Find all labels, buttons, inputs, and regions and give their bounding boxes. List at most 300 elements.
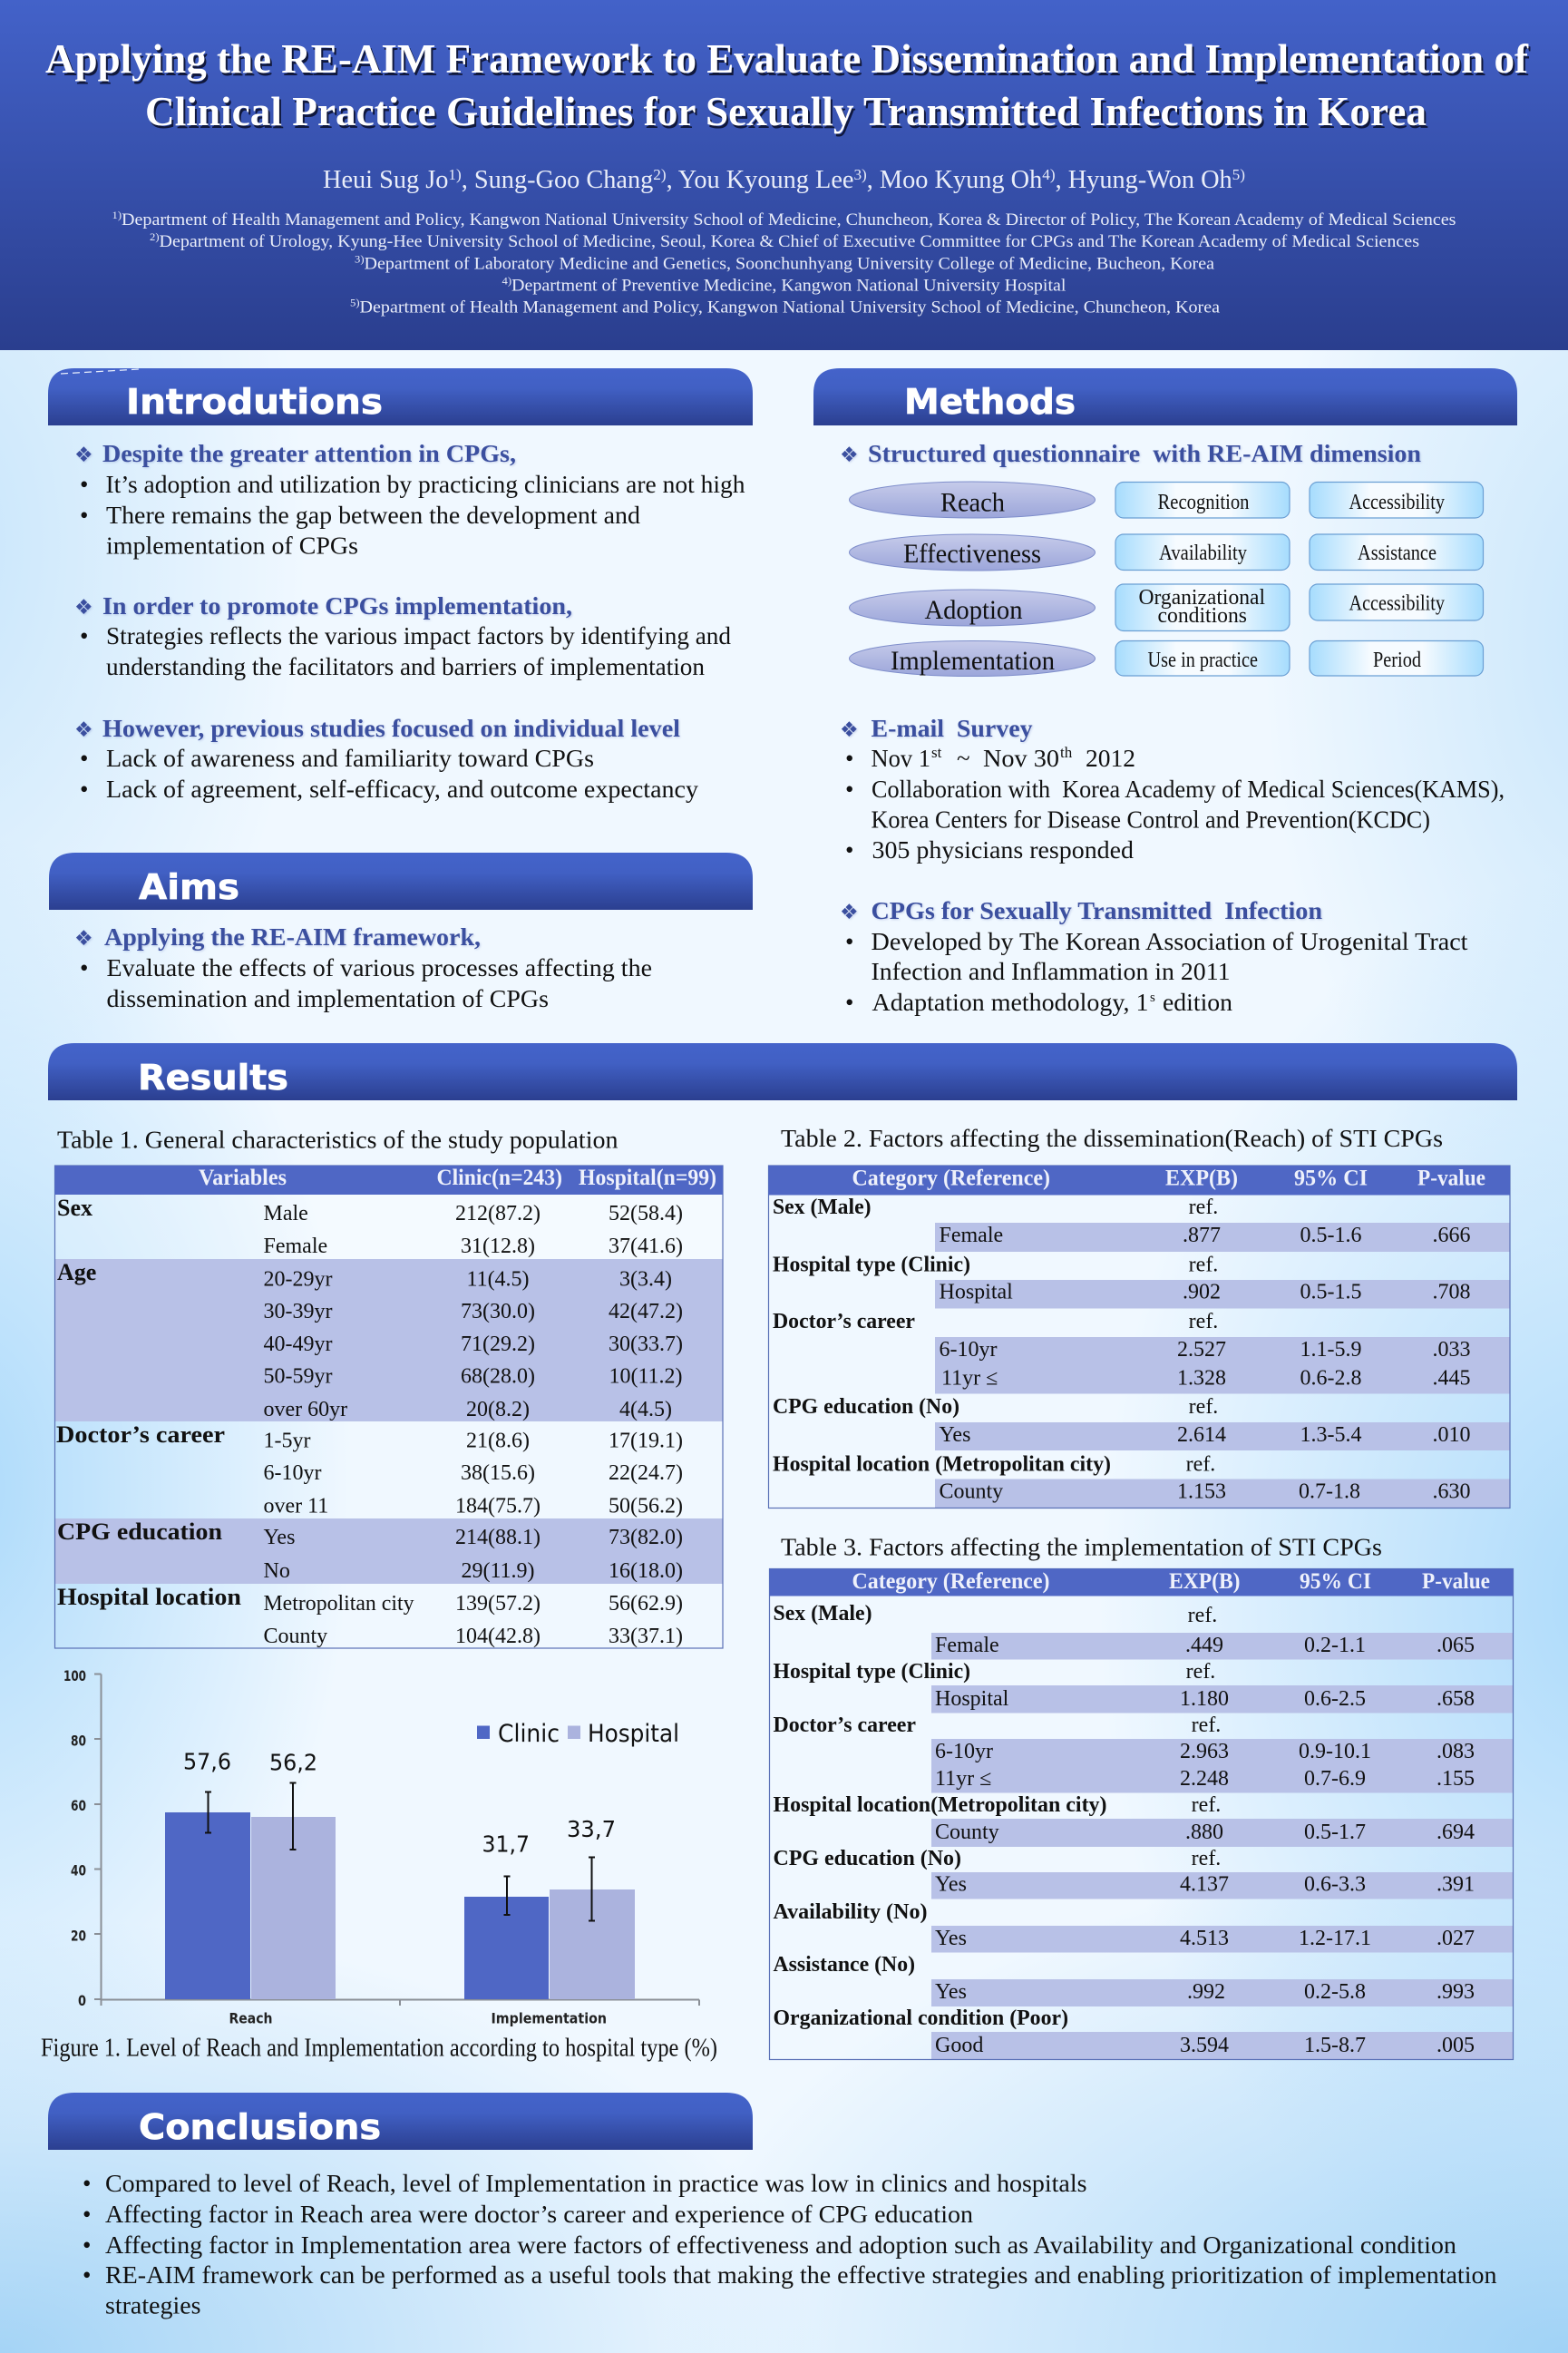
dimension: adoption: Accessibility xyxy=(1349,591,1445,615)
table 2 rows: hospital location: 0.7-1.8 xyxy=(1299,1480,1360,1504)
text block: CPGs for STI: • xyxy=(845,989,853,1016)
table 2 rows: sex: .877 xyxy=(1183,1224,1221,1247)
table 3 rows: doctor's career: ref. xyxy=(1192,1713,1221,1737)
table 1 row group: sex: Male xyxy=(263,1202,308,1225)
text block: CPGs for STI: ❖ xyxy=(840,901,859,924)
chart axes xyxy=(94,1674,699,2006)
text block: individual level xyxy=(74,715,699,803)
table 3 rows: doctor's career: 6-10yr xyxy=(935,1740,993,1763)
table 1 row group: doctor's career: 17(19.1) xyxy=(609,1430,683,1453)
text block: despite greater attention: There remains the gap between the development and xyxy=(106,502,641,529)
table 3 rows: CPG education: 0.6-3.3 xyxy=(1304,1872,1366,1896)
table 3 header row: EXP(B) xyxy=(1169,1569,1241,1594)
table 1 row group: CPG education: 73(82.0) xyxy=(609,1526,683,1549)
y axis labels: 0 xyxy=(78,1992,86,2009)
table 3 rows: hospital type: .658 xyxy=(1437,1687,1475,1711)
text block: individual level: Lack of awareness and familiarity toward CPGs xyxy=(106,745,594,772)
category labels xyxy=(229,2010,607,2026)
dimension: adoption: conditions xyxy=(1157,604,1247,628)
table 2 rows: doctor's career: 1.1-5.9 xyxy=(1300,1338,1362,1362)
table 1 header row: Clinic(n=243) xyxy=(437,1166,562,1190)
table 1 row group: hospital location: 139(57.2) xyxy=(455,1592,541,1616)
table 2 rows: doctor's career: 1.328 xyxy=(1177,1366,1226,1390)
title xyxy=(45,35,1529,134)
table 3 header row: P-value xyxy=(1422,1569,1490,1594)
table 1 row group: CPG education xyxy=(57,1518,683,1583)
table 3 rows: sex: Female xyxy=(935,1634,999,1657)
table 1 row group: sex xyxy=(57,1195,683,1258)
table 1 row group: age: 71(29.2) xyxy=(461,1333,535,1356)
heading: introductions xyxy=(48,368,753,425)
text block: individual level: • xyxy=(80,745,88,772)
text block: e-mail survey: Nov 1 xyxy=(871,745,930,772)
table 3 rows: sex: .449 xyxy=(1185,1634,1223,1657)
text block: despite greater attention: Despite the greater attention in CPGs, xyxy=(102,440,516,467)
table 1 row group: age: 10(11.2) xyxy=(609,1364,683,1388)
y axis labels xyxy=(63,1667,86,2009)
table 1 row group: doctor's career: 22(24.7) xyxy=(609,1461,683,1485)
table 2 rows: CPG education: 2.614 xyxy=(1177,1423,1226,1447)
table 3 rows: doctor's career: 0.7-6.9 xyxy=(1304,1767,1366,1791)
text block: promote implementation: Strategies reflects the various impact factors by identifying and xyxy=(106,622,732,649)
error bars xyxy=(205,1783,595,1921)
table 2 rows: doctor's career: 6-10yr xyxy=(940,1338,997,1362)
table 1 row group: age: Age xyxy=(57,1259,96,1285)
table 1 row group: doctor's career: 50(56.2) xyxy=(609,1495,683,1518)
table 1 row group: sex: 212(87.2) xyxy=(455,1202,541,1225)
affiliations xyxy=(112,209,1456,317)
table 1 header row: Hospital(n=99) xyxy=(579,1166,716,1190)
table 3 body xyxy=(769,1569,1513,2059)
text block: aims: dissemination and implementation of CPGs xyxy=(107,985,549,1012)
text block: despite greater attention: It’s adoption and utilization by practicing clinicians are not high xyxy=(105,471,745,498)
authors: 2) xyxy=(653,166,667,183)
table 1 row group: CPG education: 29(11.9) xyxy=(461,1559,535,1583)
y axis labels: 40 xyxy=(71,1861,86,1879)
table 1 body xyxy=(54,1166,723,1648)
table 1 row group: hospital location: 33(37.1) xyxy=(609,1625,683,1648)
panel: table 1 xyxy=(54,1127,723,1648)
table 2 header row: Category (Reference) xyxy=(852,1167,1050,1190)
text block: individual level: Lack of agreement, self-efficacy, and outcome expectancy xyxy=(106,776,699,803)
table 3 rows: assistance: 0.2-5.8 xyxy=(1304,1980,1366,2004)
table 1 row group: age: 11(4.5) xyxy=(466,1268,530,1292)
text block: conclusions list: • xyxy=(83,2231,91,2259)
table 1 row group: age: 73(30.0) xyxy=(461,1300,535,1323)
table 1 row group: doctor's career: 38(15.6) xyxy=(461,1461,535,1485)
table 1 row group: hospital location: Hospital location xyxy=(57,1584,242,1610)
text block: conclusions list xyxy=(83,2170,1497,2319)
table 1 row group: age: over 60yr xyxy=(263,1398,347,1421)
table 2 rows: hospital type: .708 xyxy=(1433,1281,1471,1304)
table 1 row group: hospital location xyxy=(57,1584,683,1648)
heading: results: Results xyxy=(138,1058,288,1098)
text block: promote implementation: In order to promote CPGs implementation, xyxy=(102,592,572,620)
text block: e-mail survey: Nov 30 xyxy=(983,745,1059,772)
table 2 rows: sex: 0.5-1.6 xyxy=(1300,1224,1362,1247)
text block: CPGs for STI: Infection and Inflammation in 2011 xyxy=(871,958,1230,985)
dimension: adoption: Organizational xyxy=(1139,586,1265,610)
panel: introductions xyxy=(48,368,753,803)
table 2 rows: sex: Female xyxy=(940,1224,1003,1247)
table 1 row group: sex: 37(41.6) xyxy=(609,1235,683,1258)
heading: methods xyxy=(813,368,1517,425)
table 3 rows: doctor's career xyxy=(773,1713,1475,1791)
table 2 rows: CPG education: CPG education (No) xyxy=(773,1395,959,1419)
table 3 rows: hospital location: ref. xyxy=(1192,1793,1221,1817)
figure 1 caption: Figure 1. Level of Reach and Implementation according to hospital type (%) xyxy=(41,2034,717,2063)
text block: promote implementation: ❖ xyxy=(74,596,93,620)
table 3 header row xyxy=(769,1569,1513,1596)
title: Applying the RE-AIM Framework to Evaluate Dissemination and Implementation of xyxy=(45,35,1529,82)
table 3 header row: 95% CI xyxy=(1300,1569,1371,1594)
table 1 row group: age xyxy=(57,1259,683,1421)
table 3 rows: organizational condition: 1.5-8.7 xyxy=(1304,2034,1366,2057)
bar chart: figure 1 xyxy=(41,1667,717,2063)
text block: e-mail survey: E-mail Survey xyxy=(871,715,1033,742)
affiliations: 2) xyxy=(150,230,160,243)
table 3 rows: organizational condition xyxy=(773,2006,1475,2057)
text block: e-mail survey: st xyxy=(931,744,942,761)
table 3 header row: Category (Reference) xyxy=(852,1569,1050,1594)
table 3 caption: Table 3. Factors affecting the implementation of STI CPGs xyxy=(781,1533,1382,1560)
table 2 rows: hospital location: County xyxy=(940,1480,1003,1504)
legend: Hospital xyxy=(588,1720,679,1748)
table 3 rows: availability: 4.513 xyxy=(1180,1927,1229,1950)
table 3 rows: organizational condition: Organizational condition (Poor) xyxy=(773,2006,1068,2030)
text block: individual level: However, previous studies focused on individual level xyxy=(102,715,681,742)
affiliations: Department of Health Management and Policy, Kangwon National University School of Medicine, Chuncheon, Korea xyxy=(360,298,1221,317)
table 1 row group: sex: 52(58.4) xyxy=(609,1202,683,1225)
table 3 rows: organizational condition: 3.594 xyxy=(1180,2034,1229,2057)
value labels: 56,2 xyxy=(269,1749,317,1776)
text block: e-mail survey xyxy=(840,715,1505,864)
diagram: RE-AIM dimensions xyxy=(849,482,1484,677)
table 3 rows: assistance xyxy=(773,1953,1475,2004)
text block: individual level: • xyxy=(80,776,88,803)
text block: promote implementation xyxy=(74,592,732,680)
table 2 rows: doctor's career: 0.6-2.8 xyxy=(1300,1366,1362,1390)
heading: conclusions: Conclusions xyxy=(139,2107,381,2147)
table 2 rows: doctor's career: 11yr ≤ xyxy=(941,1366,998,1390)
table 3 rows: hospital location: County xyxy=(935,1821,999,1844)
table 3 rows: availability: Yes xyxy=(935,1927,967,1950)
category labels: Reach xyxy=(229,2010,272,2026)
table 2 rows: hospital type: Hospital type (Clinic) xyxy=(773,1254,970,1277)
table 3 rows: organizational condition: Good xyxy=(935,2034,983,2057)
table 3 rows: hospital location: .880 xyxy=(1185,1821,1223,1844)
table 1 caption: Table 1. General characteristics of the study population xyxy=(57,1127,618,1154)
table 2 rows: hospital type: .902 xyxy=(1183,1281,1221,1304)
table 3 rows: CPG education: ref. xyxy=(1192,1847,1221,1870)
text block: e-mail survey: • xyxy=(845,776,853,803)
table 2 caption: Table 2. Factors affecting the dissemination(Reach) of STI CPGs xyxy=(781,1125,1443,1152)
table 1 row group: age: 68(28.0) xyxy=(461,1364,535,1388)
table 1 row group: doctor's career xyxy=(56,1421,683,1518)
text block: e-mail survey: ❖ xyxy=(840,718,859,742)
dimension: effectiveness xyxy=(849,534,1484,571)
table 3 rows: availability: Availability (No) xyxy=(773,1900,927,1924)
text block: conclusions list: • xyxy=(83,2261,91,2289)
subheading: structured questionnaire: ❖ xyxy=(840,444,859,467)
authors: , Hyung-Won Oh xyxy=(1056,166,1232,194)
table 3 rows: hospital location xyxy=(773,1793,1475,1844)
table 1 row group: age: 30(33.7) xyxy=(609,1333,683,1356)
table 3 rows: doctor's career: 2.963 xyxy=(1180,1740,1229,1763)
text block: CPGs for STI: Adaptation methodology, 1 xyxy=(872,989,1148,1016)
heading: introductions: Introdutions xyxy=(126,382,383,422)
text block: CPGs for STI: CPGs for Sexually Transmitted Infection xyxy=(871,897,1322,924)
table 2 header row: 95% CI xyxy=(1294,1167,1368,1190)
text block: CPGs for STI: • xyxy=(845,928,853,955)
table 3 rows: sex: 0.2-1.1 xyxy=(1304,1634,1366,1657)
panel: methods xyxy=(813,368,1517,1016)
legend: Clinic xyxy=(498,1720,560,1748)
table 3 rows: availability: .027 xyxy=(1437,1927,1475,1950)
table 3 rows: hospital type: ref. xyxy=(1186,1660,1215,1684)
table 1 row group: doctor's career: 184(75.7) xyxy=(455,1495,541,1518)
text block: e-mail survey: th xyxy=(1060,744,1073,761)
text block: aims: • xyxy=(80,954,88,981)
dimension: adoption xyxy=(849,584,1484,631)
table 1 row group: age: 40-49yr xyxy=(263,1333,332,1356)
table 3 rows: assistance: .992 xyxy=(1187,1980,1225,2004)
authors: , Sung-Goo Chang xyxy=(462,166,653,194)
table 3 rows: doctor's career: .083 xyxy=(1437,1740,1475,1763)
table 2 rows: CPG education xyxy=(773,1395,1471,1447)
text block: e-mail survey: 305 physicians responded xyxy=(872,836,1135,864)
table 2 rows: doctor's career: .445 xyxy=(1433,1366,1471,1390)
text block: conclusions list: strategies xyxy=(105,2291,201,2319)
table 3 rows: hospital type: 1.180 xyxy=(1180,1687,1229,1711)
table 1 row group: age: 3(3.4) xyxy=(619,1268,672,1292)
table 1 row group: sex: 31(12.8) xyxy=(461,1235,535,1258)
table 1 row group: age: 4(4.5) xyxy=(619,1398,672,1421)
table 2 rows: hospital type: 0.5-1.5 xyxy=(1300,1281,1362,1304)
text block: promote implementation: • xyxy=(80,622,88,649)
title: Clinical Practice Guidelines for Sexually Transmitted Infections in Korea xyxy=(145,88,1427,134)
table 2 rows: CPG education: 1.3-5.4 xyxy=(1300,1423,1362,1447)
table 1 row group: doctor's career: Doctor’s career xyxy=(56,1421,225,1448)
text block: e-mail survey: 2012 xyxy=(1086,745,1135,772)
table 2 rows: hospital location: Hospital location (Metropolitan city) xyxy=(773,1453,1111,1477)
y axis labels: 100 xyxy=(63,1667,86,1684)
table 1 row group: sex: Female xyxy=(263,1235,327,1258)
table 2 rows: sex xyxy=(773,1196,1471,1247)
table 3 rows: assistance: Assistance (No) xyxy=(773,1953,915,1977)
table 2 header row xyxy=(769,1166,1510,1196)
table 1 row group: CPG education: Yes xyxy=(263,1526,295,1549)
table 1 row group: doctor's career: 6-10yr xyxy=(263,1461,321,1485)
table 1 row group: CPG education: CPG education xyxy=(57,1518,223,1545)
text block: despite greater attention: • xyxy=(80,471,88,498)
text block: e-mail survey: • xyxy=(845,745,853,772)
value labels: 33,7 xyxy=(567,1816,616,1842)
table 3 rows: CPG education: .391 xyxy=(1437,1872,1475,1896)
bars: implementation xyxy=(464,1889,635,1999)
table 3 rows: assistance: Yes xyxy=(935,1980,967,2004)
affiliations: 4) xyxy=(502,275,511,288)
value labels: 31,7 xyxy=(482,1831,530,1858)
heading: results xyxy=(48,1043,1517,1100)
table 1 row group: age: 20-29yr xyxy=(263,1268,332,1292)
dimension: reach: Reach xyxy=(940,488,1005,517)
dimension: effectiveness: Effectiveness xyxy=(903,539,1041,569)
text block: aims xyxy=(74,923,652,1012)
table 1 header row xyxy=(54,1166,723,1195)
heading: aims: Aims xyxy=(139,867,239,907)
y axis labels: 60 xyxy=(71,1797,86,1814)
table 3 rows: doctor's career: 2.248 xyxy=(1180,1767,1229,1791)
table 3 rows: sex: .065 xyxy=(1437,1634,1475,1657)
text block: aims: ❖ xyxy=(74,927,93,951)
affiliations: Department of Health Management and Policy, Kangwon National University School of Medicine, Chuncheon, Korea & Director of Policy, The Korean Academy of Medical Sciences xyxy=(122,210,1456,229)
table 3 rows: doctor's career: 11yr ≤ xyxy=(935,1767,991,1791)
affiliations: 5) xyxy=(350,296,360,308)
table 3 rows: doctor's career: 0.9-10.1 xyxy=(1299,1740,1371,1763)
heading: methods: Methods xyxy=(904,382,1076,422)
table 2 rows: hospital type: ref. xyxy=(1189,1254,1218,1277)
table 2 rows: sex: ref. xyxy=(1189,1196,1218,1219)
text block: despite greater attention: • xyxy=(80,502,88,529)
text block: conclusions list: Affecting factor in Reach area were doctor’s career and experience of CPG education xyxy=(105,2201,974,2228)
panel: conclusions xyxy=(48,2093,1497,2319)
table 2 rows: CPG education: .010 xyxy=(1433,1423,1471,1447)
table 3 rows: organizational condition: .005 xyxy=(1437,2034,1475,2057)
table 3 rows: availability: 1.2-17.1 xyxy=(1299,1927,1371,1950)
table 3 rows: CPG education: CPG education (No) xyxy=(773,1847,961,1870)
table 3 rows: hospital location: 0.5-1.7 xyxy=(1304,1821,1366,1844)
text block: promote implementation: understanding the facilitators and barriers of implementation xyxy=(106,653,705,680)
bars: reach xyxy=(165,1812,336,1999)
affiliations: Department of Laboratory Medicine and Genetics, Soonchunhyang University College of Medicine, Bucheon, Korea xyxy=(365,255,1215,274)
text block: conclusions list: • xyxy=(83,2201,91,2228)
table 2 rows: doctor's career: 2.527 xyxy=(1177,1338,1226,1362)
table 3 rows: assistance: .993 xyxy=(1437,1980,1475,2004)
table 3 rows: sex: Sex (Male) xyxy=(773,1602,872,1626)
table 3 rows: CPG education: 4.137 xyxy=(1180,1872,1229,1896)
text block: despite greater attention: implementation of CPGs xyxy=(106,532,358,559)
table 3 rows: hospital type: Hospital type (Clinic) xyxy=(773,1660,970,1684)
dimension: implementation xyxy=(849,640,1484,677)
text block: despite greater attention: ❖ xyxy=(74,444,93,467)
text block: CPGs for STI xyxy=(840,897,1468,1016)
table 1 row group: CPG education: 16(18.0) xyxy=(609,1559,683,1583)
affiliations: Department of Urology, Kyung-Hee University School of Medicine, Seoul, Korea & Chief of Executive Committee for CPGs and The Korean Academy of Medical Sciences xyxy=(160,232,1419,251)
table 3 rows: hospital type xyxy=(773,1660,1475,1711)
table 2 rows: sex: Sex (Male) xyxy=(773,1196,871,1219)
text block: conclusions list: • xyxy=(83,2170,91,2197)
table 1 row group: hospital location: County xyxy=(263,1625,327,1648)
table 3 rows: doctor's career: Doctor’s career xyxy=(773,1713,916,1737)
table 2 rows: hospital location: ref. xyxy=(1186,1453,1215,1477)
table 2 rows: doctor's career xyxy=(773,1310,1471,1390)
dimension: effectiveness: Availability xyxy=(1159,542,1247,565)
panel: table 2 xyxy=(769,1125,1510,1508)
text block: e-mail survey: Korea Centers for Disease Control and Prevention(KCDC) xyxy=(871,805,1430,833)
table 1 row group: doctor's career: 1-5yr xyxy=(263,1430,310,1453)
text block: e-mail survey: • xyxy=(845,836,853,864)
text block: aims: Applying the RE-AIM framework, xyxy=(104,923,481,951)
dimension: implementation: Period xyxy=(1373,649,1421,672)
table 2 rows: doctor's career: .033 xyxy=(1433,1338,1471,1362)
table 1 row group: CPG education: 214(88.1) xyxy=(455,1526,541,1549)
table 3 rows: hospital location: .694 xyxy=(1437,1821,1475,1844)
table 2 rows: hospital location: .630 xyxy=(1433,1480,1471,1504)
authors: 4) xyxy=(1042,166,1056,183)
table 2 header row: EXP(B) xyxy=(1165,1167,1238,1190)
affiliations: 3) xyxy=(355,253,365,266)
table 2 rows: hospital type xyxy=(773,1254,1471,1304)
table 1 row group: doctor's career: 21(8.6) xyxy=(466,1430,530,1453)
panel: table 3 xyxy=(769,1533,1513,2059)
table 3 rows: hospital type: Hospital xyxy=(935,1687,1009,1711)
table 1 header row: Variables xyxy=(199,1166,287,1190)
table 1 row group: age: 50-59yr xyxy=(263,1364,332,1388)
text block: CPGs for STI: Developed by The Korean Association of Urogenital Tract xyxy=(871,928,1468,955)
dimension: effectiveness: Assistance xyxy=(1358,542,1437,565)
dimension: adoption: Adoption xyxy=(925,595,1023,625)
text block: conclusions list: RE-AIM framework can be performed as a useful tools that making the effective strategies and enabling prioritization of implementation xyxy=(105,2261,1497,2289)
text block: conclusions list: Compared to level of Reach, level of Implementation in practice was low in clinics and hospitals xyxy=(105,2170,1086,2197)
table 2 rows: sex: .666 xyxy=(1433,1224,1471,1247)
table 2 rows: hospital location: 1.153 xyxy=(1177,1480,1226,1504)
text block: e-mail survey: Collaboration with Korea Academy of Medical Sciences(KAMS), xyxy=(872,776,1505,803)
affiliations: Department of Preventive Medicine, Kangwon National University Hospital xyxy=(511,277,1066,296)
y axis labels: 80 xyxy=(71,1733,86,1749)
authors: 1) xyxy=(448,166,462,183)
table 2 rows: CPG education: ref. xyxy=(1189,1395,1218,1419)
table 1 row group: hospital location: 104(42.8) xyxy=(455,1625,541,1648)
subheading: structured questionnaire: Structured questionnaire with RE-AIM dimension xyxy=(868,440,1421,467)
table 3 rows: sex: ref. xyxy=(1188,1604,1217,1627)
y axis labels: 20 xyxy=(71,1927,86,1945)
text block: CPGs for STI: s xyxy=(1150,991,1155,1005)
dimension: implementation: Use in practice xyxy=(1148,649,1258,672)
value labels xyxy=(183,1749,616,1858)
table 2 rows: doctor's career: Doctor’s career xyxy=(773,1310,915,1333)
table 1 row group: hospital location: 56(62.9) xyxy=(609,1592,683,1616)
authors: Heui Sug Jo xyxy=(323,166,447,194)
heading: aims xyxy=(49,853,753,910)
dimension: reach xyxy=(849,482,1484,518)
authors: 3) xyxy=(853,166,867,183)
authors: , Moo Kyung Oh xyxy=(867,166,1042,194)
table 3 rows: hospital type: 0.6-2.5 xyxy=(1304,1687,1366,1711)
table 2 rows: hospital location xyxy=(773,1453,1471,1504)
authors: , You Kyoung Lee xyxy=(667,166,853,194)
table 1 row group: doctor's career: over 11 xyxy=(263,1495,328,1518)
table 1 row group: sex: Sex xyxy=(57,1195,93,1221)
table 2 body xyxy=(769,1166,1510,1508)
text block: e-mail survey: ~ xyxy=(957,745,970,772)
table 2 header row: P-value xyxy=(1417,1167,1485,1190)
text block: CPGs for STI: edition xyxy=(1163,989,1233,1016)
text block: individual level: ❖ xyxy=(74,718,93,742)
dimension: reach: Accessibility xyxy=(1349,491,1445,514)
table 2 rows: hospital type: Hospital xyxy=(940,1281,1013,1304)
table 3 rows: hospital location: Hospital location(Metropolitan city) xyxy=(773,1793,1106,1817)
affiliations: 1) xyxy=(112,209,122,221)
dimension: reach: Recognition xyxy=(1157,491,1250,514)
table 3 rows: sex xyxy=(773,1602,1475,1657)
value labels: 57,6 xyxy=(183,1749,231,1774)
table 2 rows: CPG education: Yes xyxy=(940,1423,970,1447)
text block: despite greater attention xyxy=(74,440,745,559)
authors: 5) xyxy=(1232,166,1245,183)
category labels: Implementation xyxy=(492,2010,607,2026)
table 2 rows: doctor's career: ref. xyxy=(1189,1310,1218,1333)
